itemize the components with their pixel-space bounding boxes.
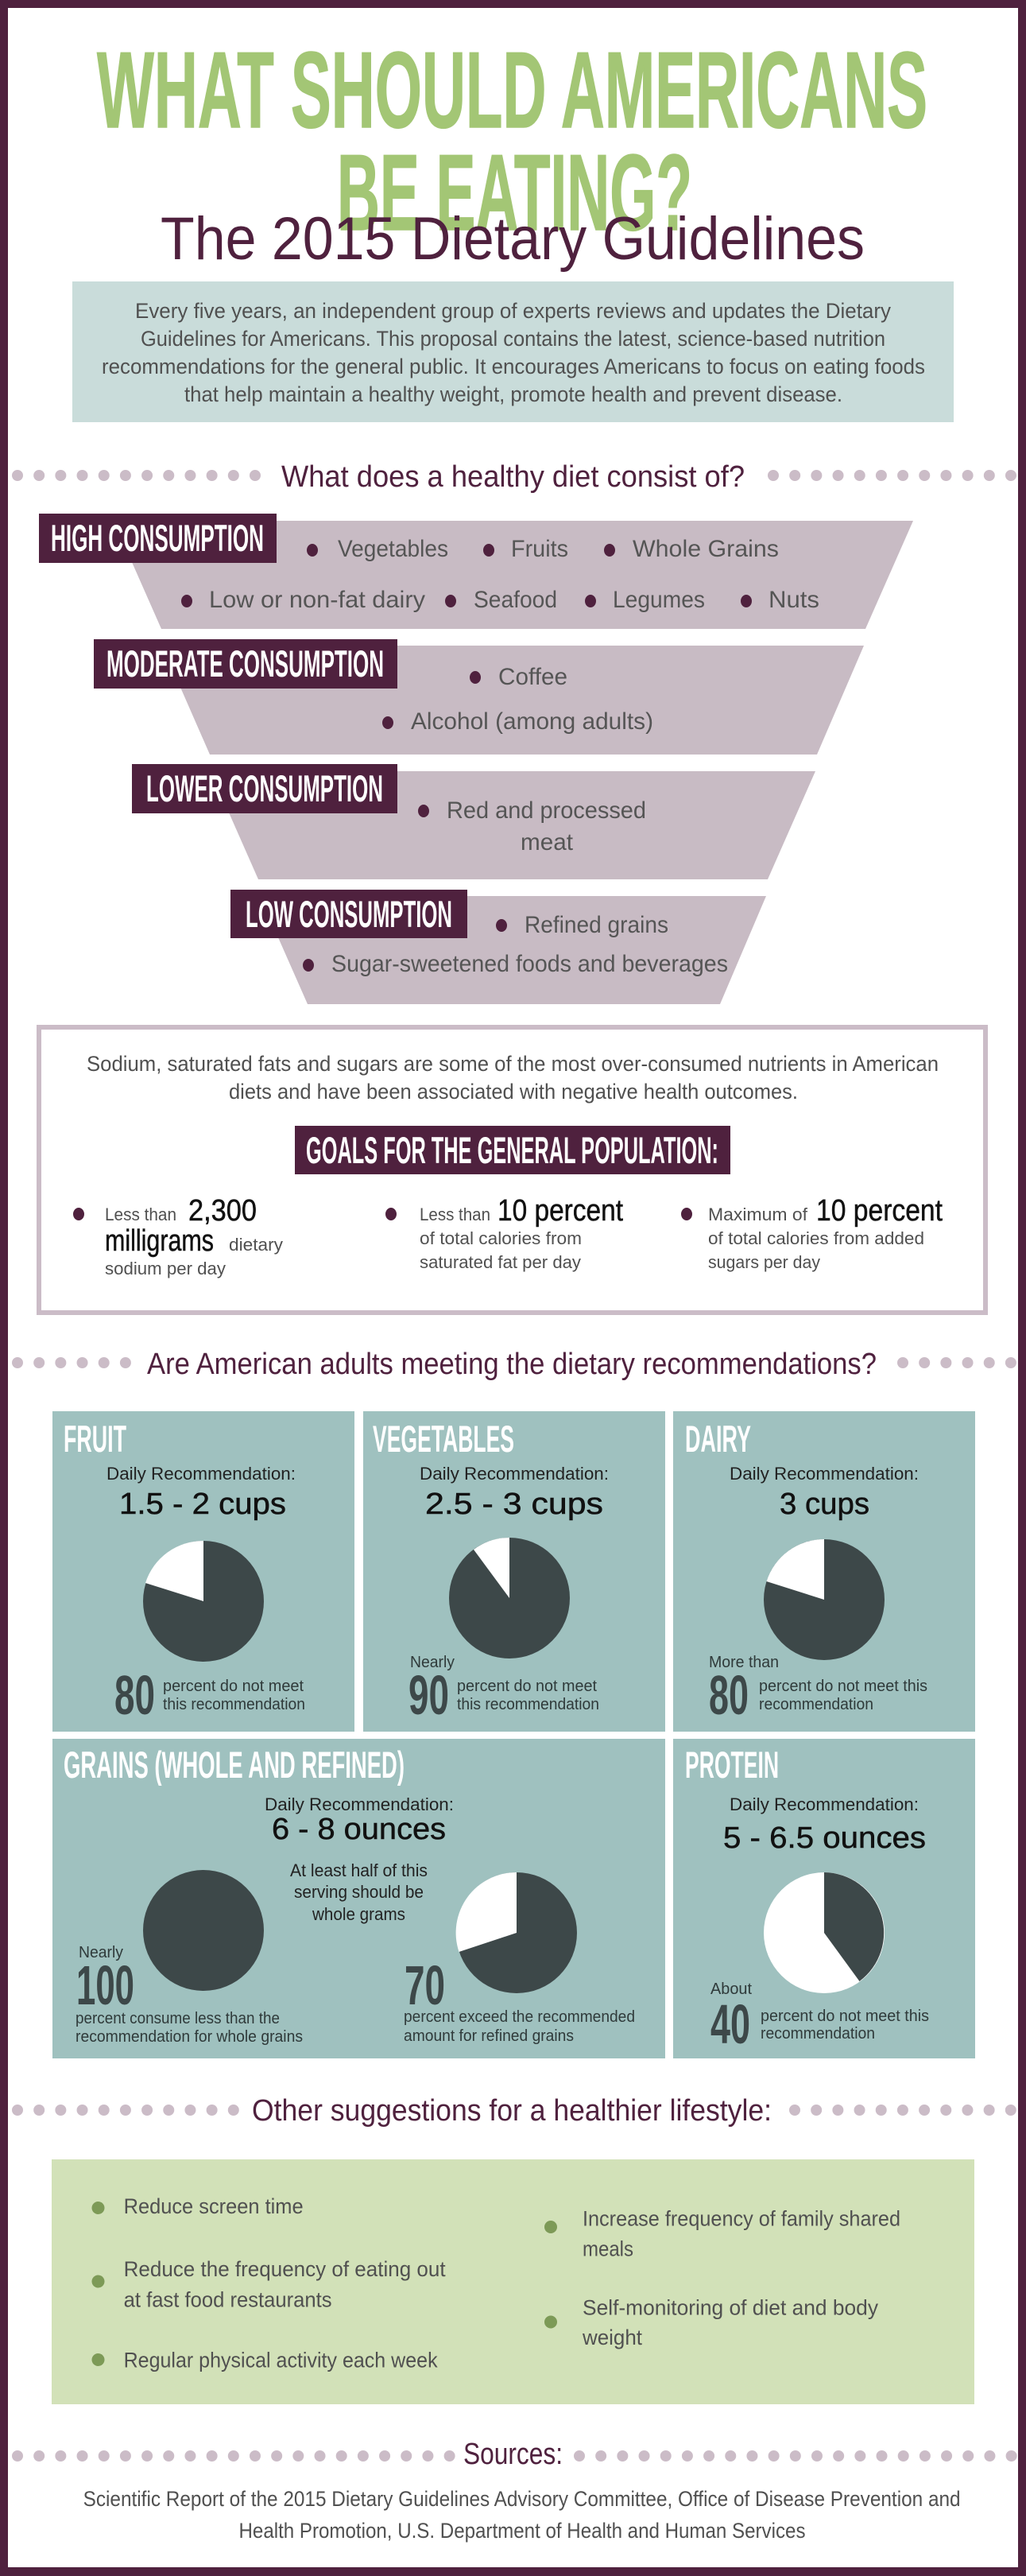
- label: low consumption: LOW CONSUMPTION: [246, 893, 452, 935]
- suggestions right column: Self-monitoring of diet and body: [583, 2295, 878, 2319]
- goals intro text: Sodium, saturated fats and sugars are some of the most over-consumed nutrients in American: [87, 1052, 939, 1076]
- suggestions bullets: [92, 2202, 557, 2366]
- panel title: fruit: FRUIT: [64, 1418, 126, 1460]
- panel: grains: [52, 1739, 665, 2058]
- suggestions left column: [124, 2194, 446, 2372]
- daily recommendation: vegetables: [420, 1464, 609, 1521]
- goals intro text: diets and have been associated with negative health outcomes.: [229, 1080, 798, 1104]
- note: whole grains: [290, 1860, 428, 1924]
- daily recommendation: protein: 5 - 6.5 ounces: [723, 1821, 926, 1855]
- statistic: dairy: More than: [709, 1654, 779, 1671]
- suggestions left column: at fast food restaurants: [124, 2288, 332, 2312]
- statistic: dairy: [709, 1654, 927, 1726]
- daily recommendation: vegetables: Daily Recommendation:: [420, 1464, 609, 1484]
- panel title: grains: GRAINS (WHOLE AND REFINED): [64, 1744, 405, 1786]
- panel: moderate consumption: [94, 639, 864, 755]
- list: high consumption foods: Legumes: [613, 587, 705, 613]
- statistic: protein: [710, 1980, 929, 2055]
- goal: added sugars: of total calories from added: [708, 1228, 924, 1248]
- panel title: protein: PROTEIN: [685, 1744, 779, 1786]
- goal: sodium: sodium per day: [105, 1259, 226, 1278]
- list: low consumption foods: Refined grains: [525, 912, 668, 938]
- daily recommendation: fruit: 1.5 - 2 cups: [119, 1488, 286, 1521]
- introduction text: recommendations for the general public. It encourages Americans to focus on eating foods: [102, 355, 925, 378]
- panel: vegetables: [363, 1411, 665, 1732]
- goal: saturated fat: 10 percent: [498, 1194, 623, 1228]
- pie chart: vegetables 90 percent: [449, 1538, 570, 1658]
- daily recommendation: grains: [265, 1794, 454, 1846]
- statistic: fruit: [114, 1664, 305, 1726]
- panel: other suggestions: [52, 2159, 974, 2404]
- suggestions right column: weight: [582, 2326, 642, 2349]
- panel: introduction: [72, 281, 954, 422]
- goal: saturated fat: [385, 1194, 623, 1272]
- statistic: whole grains: Nearly: [79, 1944, 123, 1961]
- suggestions left column: Reduce screen time: [124, 2194, 304, 2218]
- statistic: whole grains: 100: [76, 1954, 134, 2016]
- daily recommendation: grains: 6 - 8 ounces: [272, 1813, 446, 1846]
- goal: added sugars: [681, 1194, 943, 1272]
- introduction text: that help maintain a healthy weight, promote health and prevent disease.: [184, 382, 842, 406]
- suggestions left column: Reduce the frequency of eating out: [124, 2257, 446, 2281]
- daily recommendation: grains: Daily Recommendation:: [265, 1794, 454, 1814]
- sources text: Health Promotion, U.S. Department of Health and Human Services: [238, 2519, 806, 2543]
- list: moderate consumption foods: Alcohol (among adults): [411, 708, 653, 735]
- daily recommendation: protein: [723, 1794, 926, 1855]
- panel: high consumption: [39, 514, 913, 629]
- statistic: whole grains: [75, 1944, 303, 2046]
- goal: sodium: [73, 1194, 283, 1278]
- statistic: protein: 40: [710, 1993, 750, 2055]
- list: high consumption foods: Seafood: [474, 587, 557, 613]
- daily recommendation: protein: Daily Recommendation:: [730, 1794, 919, 1814]
- statistic: fruit: 80: [114, 1664, 155, 1726]
- note: whole grains: At least half of this: [290, 1860, 428, 1880]
- statistic: whole grains: recommendation for whole grains: [75, 2028, 303, 2046]
- panel title: dairy: DAIRY: [685, 1418, 751, 1460]
- list: high consumption foods: Nuts: [769, 587, 819, 613]
- goals intro text: [87, 1052, 939, 1104]
- label: moderate consumption: MODERATE CONSUMPTION: [106, 642, 384, 685]
- pie chart: dairy 80 percent: [764, 1539, 885, 1660]
- daily recommendation: dairy: [730, 1464, 919, 1521]
- note: whole grains: serving should be: [294, 1882, 424, 1902]
- statistic: vegetables: [408, 1654, 599, 1726]
- panel title: vegetables: VEGETABLES: [373, 1418, 514, 1460]
- goal: saturated fat: saturated fat per day: [420, 1252, 581, 1272]
- panel: low consumption: [230, 890, 766, 1004]
- goal: saturated fat: of total calories from: [420, 1228, 582, 1248]
- list: high consumption foods: Fruits: [511, 536, 568, 562]
- title: BE EATING?: [337, 132, 692, 253]
- goal: sodium: 2,300: [188, 1194, 257, 1228]
- goal: sodium: dietary: [229, 1235, 283, 1255]
- panel: protein: [673, 1739, 975, 2058]
- statistic: refined grains: percent exceed the recommended: [404, 2008, 635, 2026]
- goal: added sugars: 10 percent: [816, 1194, 943, 1228]
- statistic: whole grains: percent consume less than the: [75, 2010, 280, 2027]
- goal: added sugars: Maximum of: [708, 1205, 808, 1224]
- suggestions right column: [582, 2207, 900, 2349]
- list: high consumption foods: Low or non-fat dairy: [209, 587, 425, 613]
- statistic: dairy: percent do not meet this: [759, 1678, 927, 1695]
- pie chart: protein 40 percent: [764, 1872, 885, 1993]
- suggestions right column: meals: [583, 2237, 633, 2261]
- sources text: [83, 2487, 961, 2543]
- label: high consumption: HIGH CONSUMPTION: [51, 517, 264, 559]
- section heading: sources: Sources:: [463, 2438, 563, 2471]
- section heading: healthy diet: What does a healthy diet consist of?: [281, 460, 745, 494]
- pie chart: whole grains 100 percent: [143, 1870, 264, 1991]
- list: high consumption foods: [181, 536, 819, 613]
- daily recommendation: fruit: Daily Recommendation:: [106, 1464, 296, 1484]
- statistic: fruit: percent do not meet: [163, 1678, 304, 1695]
- list: low consumption foods: [303, 912, 728, 977]
- note: whole grains: whole grams: [312, 1904, 405, 1924]
- statistic: refined grains: amount for refined grains: [404, 2027, 574, 2045]
- goal: sodium: milligrams: [105, 1224, 214, 1258]
- statistic: protein: percent do not meet this: [761, 2008, 929, 2025]
- statistic: vegetables: Nearly: [410, 1654, 455, 1671]
- list: lower consumption foods: meat: [521, 829, 574, 855]
- suggestions left column: Regular physical activity each week: [124, 2349, 438, 2372]
- list: lower consumption foods: [418, 797, 646, 855]
- section heading: meeting recommendations: Are American adults meeting the dietary recommendations?: [147, 1348, 877, 1381]
- introduction text: Every five years, an independent group of experts reviews and updates the Dietary: [135, 299, 891, 323]
- list: low consumption foods: Sugar-sweetened foods and beverages: [331, 951, 728, 977]
- panel: dairy: [673, 1411, 975, 1732]
- section heading: other suggestions: Other suggestions for a healthier lifestyle:: [252, 2094, 772, 2128]
- statistic: dairy: 80: [709, 1664, 749, 1726]
- statistic: refined grains: [404, 1954, 635, 2045]
- goal: sodium: Less than: [105, 1205, 176, 1224]
- goal: saturated fat: Less than: [420, 1205, 490, 1224]
- title: [97, 29, 927, 253]
- daily recommendation: dairy: Daily Recommendation:: [730, 1464, 919, 1484]
- list: moderate consumption foods: Coffee: [498, 664, 567, 690]
- suggestions right column: Increase frequency of family shared: [583, 2207, 900, 2231]
- statistic: vegetables: this recommendation: [457, 1696, 599, 1713]
- label: lower consumption: LOWER CONSUMPTION: [146, 767, 383, 809]
- daily recommendation: vegetables: 2.5 - 3 cups: [425, 1488, 603, 1521]
- statistic: protein: About: [710, 1980, 752, 1998]
- list: high consumption foods: Vegetables: [338, 536, 448, 562]
- goal: added sugars: sugars per day: [708, 1252, 820, 1272]
- subtitle: The 2015 Dietary Guidelines: [161, 205, 865, 273]
- statistic: refined grains: 70: [405, 1954, 445, 2016]
- statistic: protein: recommendation: [761, 2025, 875, 2043]
- panel: fruit: [52, 1411, 354, 1732]
- pie chart: refined grains 70 percent: [456, 1872, 577, 1993]
- introduction text: Guidelines for Americans. This proposal contains the latest, science-based nutrition: [141, 327, 885, 351]
- statistic: fruit: this recommendation: [163, 1696, 305, 1713]
- list: moderate consumption foods: [382, 664, 653, 735]
- pie chart: fruit 80 percent: [143, 1541, 264, 1662]
- statistic: vegetables: 90: [408, 1664, 449, 1726]
- panel: goals: [39, 1027, 985, 1313]
- daily recommendation: dairy: 3 cups: [780, 1488, 869, 1521]
- list: lower consumption foods: Red and processed: [447, 797, 646, 824]
- introduction text: [102, 299, 925, 406]
- goals heading: [295, 1126, 730, 1174]
- statistic: dairy: recommendation: [759, 1696, 873, 1713]
- list: high consumption foods: Whole Grains: [633, 536, 779, 562]
- daily recommendation: fruit: [106, 1464, 296, 1521]
- panel: lower consumption: [132, 764, 815, 879]
- statistic: vegetables: percent do not meet: [457, 1678, 597, 1695]
